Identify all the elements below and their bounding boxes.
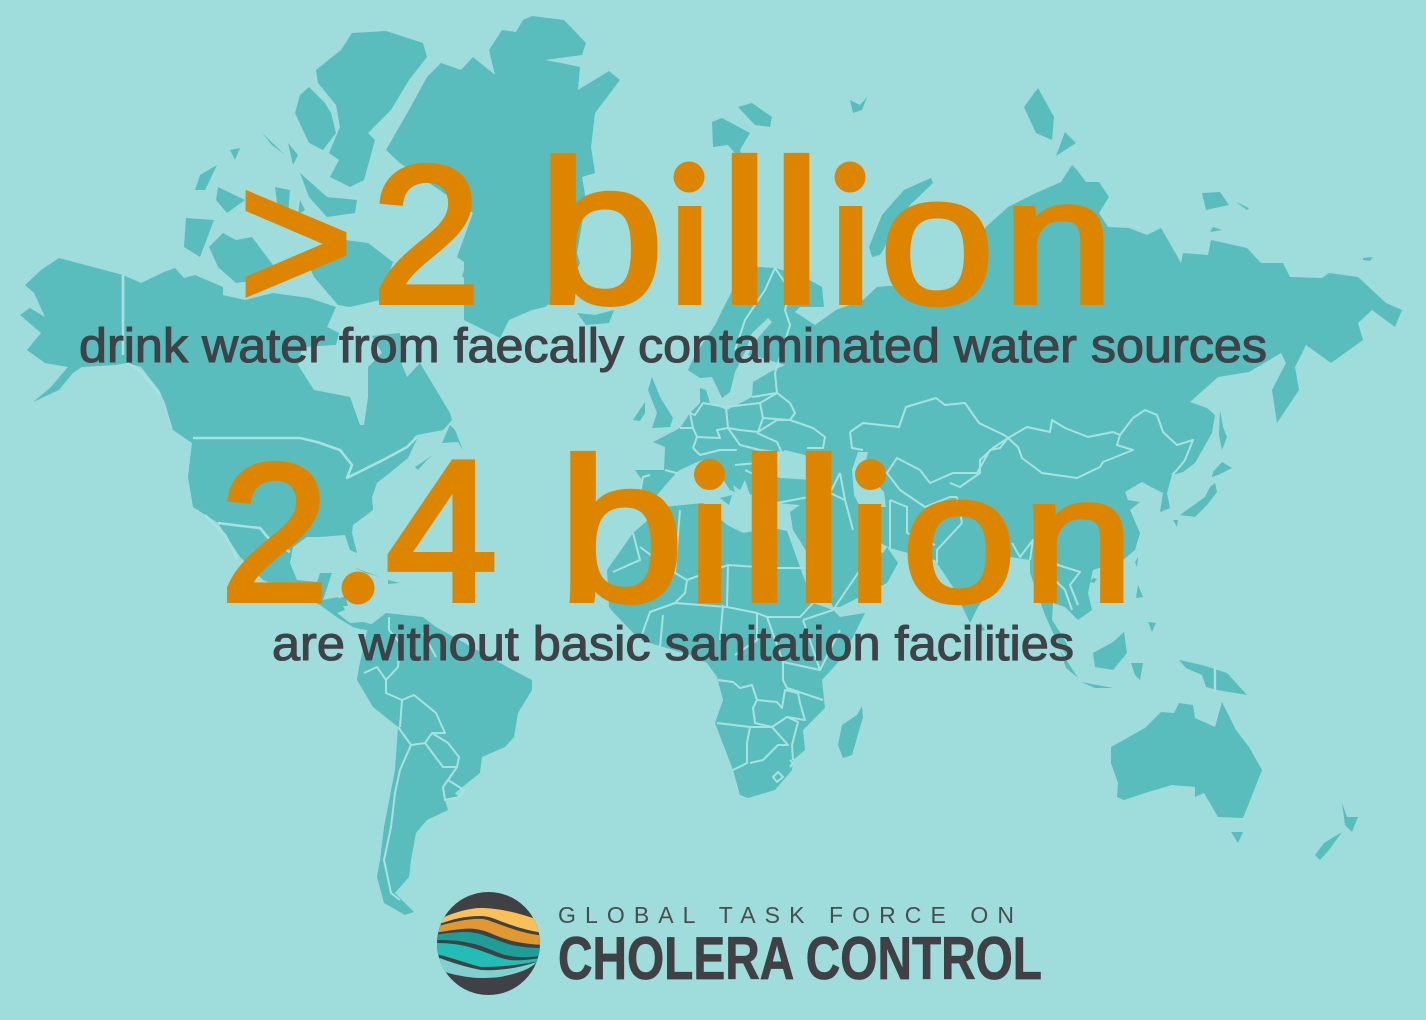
map: Caspian Sea [852,452,886,507]
logo text: Global Task Force on: GLOBAL TASK FORCE ON [558,902,1014,928]
map: Newfoundland and maritime islands [336,425,463,606]
number: 2.4: 2 [220,424,329,642]
map: Madagascar [838,706,863,758]
word: billion: o [902,435,1016,641]
word: billion: i [848,440,892,639]
word: billion: n [1023,440,1134,639]
map: North America [20,258,452,631]
map: Australia [1111,702,1262,818]
number: >2: 2 [372,126,481,344]
caption: drink water: drink water from faecally contaminated water sources [79,320,1267,373]
map: Africa [607,503,865,798]
word: billion: l [771,119,822,346]
headline: >2 billion [246,152,1104,308]
map: Black Sea [770,450,830,480]
word: billion: b [538,119,664,346]
word: billion: l [793,417,844,644]
word: billion: i [829,142,873,341]
word: billion: i [668,142,712,341]
word: billion: b [558,417,684,644]
headline: 2.4 billion [227,450,1124,606]
logo: Global Task Force on Cholera Control [435,890,1042,998]
map: Tasmania [1231,832,1243,843]
map: Greenland [386,16,620,338]
headline dots, second line [342,459,886,604]
map: Country borders [123,268,1215,900]
map: Iceland [577,310,614,325]
map: Eurasia [635,165,1402,655]
word: billion: n [1003,142,1114,341]
map: New Zealand [1315,803,1358,860]
map: Canadian Arctic islands [184,31,474,307]
map: Great Britain and Ireland [633,377,673,428]
word: billion: o [880,137,994,343]
number: 2.4: . [331,424,386,642]
caption: are without: are without basic sanitation facilities [272,618,1074,671]
number: 2.4: 4 [386,420,497,643]
map: East and Southeast Asian islands [979,410,1232,688]
headline i-dots, first line [674,162,866,192]
icon: wave globe [437,892,540,995]
number: >2: > [239,132,353,350]
word: billion: l [719,119,770,346]
map: South America [357,613,532,915]
word: billion: l [739,417,790,644]
word: billion: i [688,440,732,639]
logo text: Cholera Control: CHOLERA CONTROL [558,925,1042,992]
map: New Guinea [1179,660,1247,695]
map: Arctic islands of Eurasia [712,88,1373,508]
